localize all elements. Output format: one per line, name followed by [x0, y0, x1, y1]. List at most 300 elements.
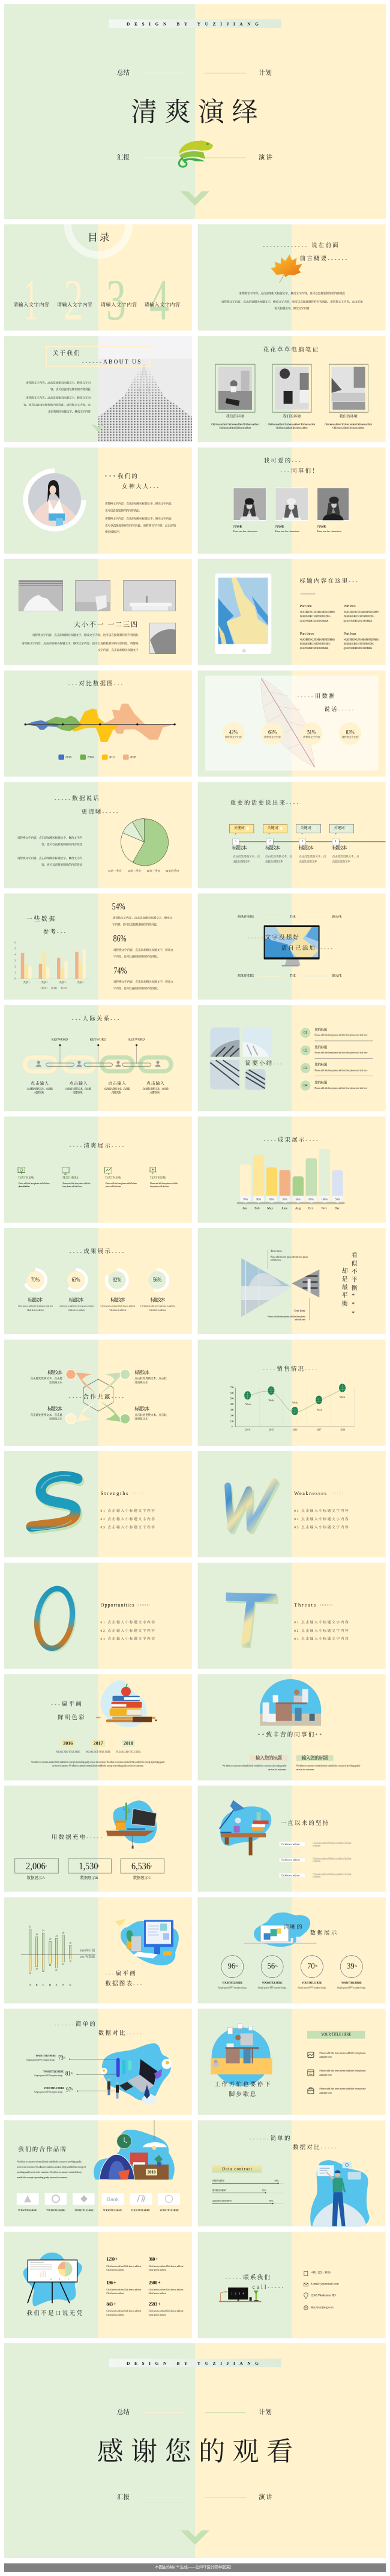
photo 1	[19, 580, 62, 611]
frame	[46, 347, 150, 367]
text block: part four: WE ADHERE TO CUSTOMER-ORIENTED, FIRMLY	[344, 639, 379, 642]
heading: ------简单的	[55, 2020, 97, 2028]
panel: preface 说在前面	[198, 224, 386, 331]
stat 51%: 51%	[307, 729, 316, 735]
body text: 请替换文字内容、点击添加相关标题文字、修改文字内容、也可以直接复制你的内容到此。请替换文字内容、点击添加	[221, 300, 363, 304]
name captions: Here are the characters.	[233, 530, 258, 533]
subheading: 数据图表---	[105, 1980, 144, 1987]
step 2: 标题文本	[265, 845, 280, 851]
caption details: Click here to add text Click here to add text Click here to add text	[325, 422, 373, 425]
chart: line: 0	[232, 1426, 233, 1428]
stat 186+	[106, 2280, 142, 2295]
body text: 请替换文字内容、点击添加相关标题文字、修改文字内容、也可以直接复制你的内容到此。请替换	[22, 641, 139, 645]
letter W	[228, 1482, 277, 1531]
ring captions: 标题文本	[110, 1296, 125, 1302]
list: 03 点击输入小标题文字内容	[101, 1637, 155, 1641]
heading: -----文字没想好	[248, 933, 300, 941]
column right: We adhere to customer-oriented, firmly establish the concept of providing quality	[296, 1765, 361, 1768]
panel: 简要小结	[198, 1005, 386, 1111]
text block: part two	[344, 604, 379, 622]
name captions: NAME	[233, 524, 242, 529]
stat 2593+: Click here to add text Click here to add text	[149, 2310, 184, 2312]
colons: ::::::::	[137, 1604, 149, 1607]
feature 4: here please add title here	[150, 1185, 169, 1188]
panel: 清爽展示	[4, 1116, 192, 1223]
petal top-right	[101, 1370, 130, 1394]
stat 186+: Click here to add text	[106, 2292, 124, 2295]
heading: weaknesses: Weaknesses	[294, 1490, 326, 1496]
item bottom-left	[30, 1406, 62, 1421]
caption details	[211, 422, 373, 429]
panel: 一直以来的坚持	[198, 1786, 386, 1892]
banner: design by: DESIGN BY YUZIJIANG	[127, 22, 259, 26]
tag: data contrast: Data contrast	[222, 2167, 252, 2172]
illustration: office desk	[260, 1679, 321, 1726]
subheading: call-----	[253, 2284, 286, 2290]
item: calendar icon: Please add title here please add title here please	[319, 2069, 366, 2072]
item 2	[279, 1857, 352, 1863]
list: 02 点击输入小标题文字内容	[294, 1628, 349, 1633]
caption details: Click here to add text Click here to add text	[219, 426, 251, 429]
stat 56%	[258, 1956, 287, 1989]
body text: 请替换文字内容、点击添加相关标题文字、修改文字内容、	[105, 502, 174, 506]
hexagon	[83, 1379, 113, 1411]
heading: ---扁平画	[105, 1970, 137, 1977]
label: 计划	[205, 2408, 272, 2416]
item: image icon	[308, 2052, 366, 2058]
stat box 1,530k: 1,530k	[79, 1860, 100, 1872]
body text: 请替换文字内容、点击添加相关标题文字、修改文字内	[26, 395, 91, 400]
heading: ----成果展示----	[70, 1248, 125, 1255]
heading: ----清爽展示----	[70, 1142, 125, 1149]
chart: line: 2018	[341, 1428, 345, 1431]
feature 1	[18, 1167, 50, 1188]
step 4: 4	[335, 840, 337, 843]
ring captions: 标题文本	[150, 1296, 166, 1302]
item top-left: 点击此处更换文本、点击此	[30, 1376, 62, 1380]
text block: part one: ESTABLISH THE CONCEPT OF PROVIDING	[300, 616, 331, 618]
keyword row bottom: THE	[290, 974, 296, 978]
list: 03 点击输入小标题文字内容	[294, 1637, 349, 1641]
stat 74%: 字内容、也可以直接复制你的内容到此。	[113, 986, 160, 990]
label: 总结	[117, 2408, 185, 2416]
chart: rounded bars	[237, 1149, 345, 1211]
translucent card	[205, 675, 379, 771]
panel: 一些数据参考	[4, 893, 192, 999]
feature 3	[104, 1167, 137, 1188]
label: 总结: 总结	[117, 68, 130, 77]
logos row	[17, 2193, 180, 2205]
logo captions: YOUR TITLE HERE	[160, 2209, 179, 2212]
panel: 工作再忙	[198, 2008, 386, 2115]
item 2: Click here to add text	[281, 1859, 300, 1862]
illustration: isometric laptop	[101, 2043, 172, 2104]
label: 总结: 总结	[117, 2408, 130, 2416]
stat 42%	[222, 722, 244, 744]
subheading: 数据展示	[310, 1929, 338, 1936]
item: image icon: add title here	[319, 2055, 332, 2058]
stat 2593+: Click here to add text	[149, 2314, 167, 2316]
stat 39%: Simple general PPT template design.	[337, 1987, 366, 1989]
chart: rounded bars: Aug	[295, 1206, 301, 1210]
panel: 对比数据图	[4, 671, 192, 777]
list item 03	[301, 1062, 373, 1076]
subheading: 数据对比-----	[98, 2029, 144, 2037]
chart: line: 500	[230, 1398, 234, 1400]
colleague photo 2	[275, 488, 308, 521]
photo triangle large	[241, 1258, 292, 1317]
stat 68%	[262, 722, 283, 744]
list item 01: 01	[304, 1031, 307, 1035]
legend: 2017	[109, 756, 115, 759]
keyword row top: THE	[290, 915, 296, 919]
panel: SWOT Threats	[198, 1563, 386, 1669]
label: 计划: 计划	[259, 2408, 272, 2416]
text block: part two: Part two	[344, 604, 356, 608]
item text 1: 点击输入您的文本、点击输	[27, 1087, 53, 1091]
subheading: about us: ------ABOUT US	[82, 359, 142, 365]
list: 01 点击输入小标题文字内容	[294, 1620, 349, 1625]
stat 54%: 54%	[112, 902, 125, 912]
caption details: Click here to add text Click here to add text Click here to add text	[268, 422, 316, 425]
bar labels: 26	[29, 1972, 31, 1975]
chart: diverging bars	[21, 1929, 95, 1971]
column right: 输入您的标题	[302, 1755, 328, 1761]
item text 2: 入您的文本。	[73, 1091, 85, 1095]
heading: ---人际关系---	[72, 1015, 121, 1022]
body text: 也可以直接复制你的内容到此。	[105, 508, 142, 512]
callout 73%: 73%	[58, 2054, 65, 2061]
chart: rounded bars: 55%	[335, 1197, 340, 1200]
stat 39%: YOUR TITLE HERE	[341, 1981, 362, 1984]
feature 4: Please add title here please add title	[150, 1182, 178, 1185]
keyword row top: BRAVE	[332, 915, 342, 919]
contents labels: 请输入文字内容	[144, 301, 180, 307]
step 4: 标题文本	[332, 845, 347, 851]
stat 843+: Click here to add text	[106, 2314, 124, 2316]
panel: 数据说话 pie	[4, 782, 192, 888]
body text	[17, 2161, 86, 2179]
tag: data contrast	[212, 2165, 262, 2173]
legend: 第二季度	[130, 869, 142, 873]
icon: maple leaf	[271, 254, 302, 283]
heading: -----用数据	[298, 692, 336, 699]
item top-right: 标题文本	[134, 1369, 149, 1375]
name captions	[233, 524, 342, 533]
body text: 容、也可以直接复制你的内容到此	[41, 842, 82, 846]
panel: Data contrast	[198, 2120, 386, 2228]
chart: line	[230, 1383, 355, 1431]
callout top: add title here	[271, 1259, 281, 1261]
feature 2: Please add title here please add title	[62, 1182, 91, 1185]
chart: rounded bars: Nov	[321, 1206, 327, 1210]
panel: 同事们	[198, 448, 386, 554]
label: 汇报: 汇报	[117, 154, 130, 161]
list item 01: 您的标题	[314, 1027, 328, 1032]
list: 01 点击输入小标题文字内容	[101, 1620, 155, 1625]
stat 51%: 请替换文字内容	[303, 735, 320, 738]
step 2: 关键词	[268, 825, 278, 830]
photo card 2	[272, 364, 311, 412]
chart: line: 300	[230, 1409, 234, 1411]
callout 97%: Simple general PPT template design.	[34, 2091, 63, 2093]
step 1: 1	[235, 840, 237, 843]
bar labels: C	[42, 1983, 44, 1986]
feature 2: here please add title here	[62, 1185, 82, 1188]
title tag	[307, 2031, 365, 2038]
chart: rounded bars: Oct	[308, 1206, 313, 1210]
callout 81%: Simple general PPT template design.	[34, 2074, 63, 2077]
letter T	[226, 1597, 278, 1648]
chart: rounded bars: 70%	[243, 1197, 248, 1200]
stat 54%: 请替换文字内容、点击添加相关标题文字、修改文	[112, 916, 173, 920]
logo captions: YOUR TITLE HERE	[131, 2209, 150, 2212]
stat box 1,530k	[68, 1859, 112, 1880]
item 1: Click here to add text	[281, 1843, 300, 1846]
panel: 我们的女神大人	[4, 448, 192, 554]
chart: bars: 系列3	[61, 986, 67, 990]
panel: timeline 重要的话	[198, 782, 386, 888]
name captions: NAME	[317, 524, 326, 529]
chart: rounded bars: Feb	[254, 1206, 260, 1210]
column left: We adhere to customer-oriented, firmly establish the concept of providing quality	[223, 1765, 287, 1768]
stat box 2,006k	[15, 1859, 58, 1880]
feature 3: Please add title here please add title here	[106, 1182, 137, 1185]
panel: 致辛苦的同事们	[198, 1674, 386, 1781]
bar labels: 2018年计划	[80, 1948, 95, 1953]
panel: cover slide	[4, 4, 386, 219]
stat 2500+: Click here to add text	[149, 2292, 167, 2295]
panel: 扁平画 books	[4, 1674, 192, 1781]
chart: line: 2015	[269, 1428, 274, 1431]
body text	[31, 1761, 165, 1767]
bar labels: F	[62, 1983, 64, 1986]
illustration: monitor	[264, 925, 320, 966]
item text 3: 点击输入您的文本、点击输	[104, 1087, 130, 1091]
legend: 2016	[88, 756, 94, 759]
text block: part two: ESTABLISH THE CONCEPT OF PROVIDING	[344, 616, 374, 618]
stat 1239+	[106, 2257, 142, 2271]
stat 74%: 74%	[114, 966, 127, 976]
item text 1: 点击输入	[31, 1080, 49, 1086]
contents labels	[13, 301, 180, 307]
contents labels: 请输入文字内容	[101, 301, 137, 307]
ring 63%: 63%	[72, 1277, 80, 1283]
panel: triangles	[198, 1228, 386, 1334]
photo tiles	[210, 1028, 272, 1090]
item top-left	[30, 1369, 62, 1385]
chart: bars: 类别3	[59, 980, 66, 984]
captions	[226, 414, 358, 419]
numerals 1-4: 4	[149, 268, 169, 332]
illustration: interior: 2018	[148, 2170, 156, 2175]
text block: part four: QUALITY SERVICES FOR CUSTOMERS.	[344, 647, 373, 650]
ring details: Click here to add text Click here to add text	[140, 1305, 176, 1307]
caption details: Click here to add text Click here to add text	[332, 426, 365, 429]
stat box 2,006k: 2,006k	[26, 1860, 47, 1872]
bar labels: 10	[69, 1960, 71, 1963]
body text: services for customers. We adhere to customer-oriented, firmly establish the concept of	[17, 2166, 86, 2169]
body text: 请替换文字内容、点击添加相关标题文字、修改文字内容、	[105, 517, 174, 521]
heading: ----合作共赢----	[69, 1393, 125, 1400]
stat 1239+: Click here to add text Click here to add text	[106, 2265, 142, 2268]
panel: 联系我们	[198, 2232, 386, 2338]
list: 02 点击输入小标题文字内容	[101, 1517, 155, 1521]
ring 82%: 82%	[113, 1277, 121, 1283]
ring details: Click here to add text	[149, 1309, 167, 1311]
chart: line: Week	[292, 1401, 298, 1404]
illustration: interior	[94, 2120, 175, 2179]
chart: line: Week	[245, 1403, 251, 1406]
feature 1: Please add title here please add title here	[19, 1182, 50, 1185]
stat 96%	[218, 1956, 247, 1989]
list item 03: 03	[304, 1066, 307, 1070]
captions: 我们的环境	[226, 414, 244, 419]
colons: ::::::::	[131, 1492, 145, 1496]
stat 51%	[301, 722, 323, 744]
chart: rounded bars: 100%	[322, 1197, 328, 1200]
bar labels: 33	[29, 1926, 31, 1928]
contact: phone: +001 123 - 3456	[311, 2272, 331, 2275]
panel: SWOT Opportunities	[4, 1563, 192, 1669]
legend: 第四季度	[168, 869, 179, 873]
bar labels: 34	[42, 1929, 44, 1932]
captions: 我们的环境	[340, 414, 358, 419]
panel: 简单的数据对比 isometric	[4, 2008, 192, 2115]
stat 56%: Simple general PPT template design.	[258, 1987, 287, 1989]
body text: 请替换文字内容、点击添加相关标题文字、修改文字内	[26, 380, 91, 385]
item 3: Click here to add text	[281, 1874, 300, 1877]
step 4: 关键词	[334, 825, 344, 830]
heading: 我们的合作品牌	[18, 2146, 67, 2153]
stat 68%: 68%	[268, 729, 277, 735]
item bottom-right: 标题文本	[134, 1406, 149, 1412]
step 3	[296, 824, 326, 863]
item 2: Click here to add text Click here to add text Click here	[313, 1857, 352, 1860]
list item 02	[301, 1045, 373, 1058]
progress: development: DEVELOPMENT	[212, 2190, 227, 2192]
feature 3: please add title here	[106, 1185, 121, 1188]
item: calendar icon: add title here	[319, 2073, 332, 2076]
item bottom-right: 处更换文本	[134, 1417, 148, 1421]
subheading: 数据对比-----	[293, 2143, 338, 2151]
panel: 合作品牌	[4, 2120, 192, 2226]
callout 97%	[34, 2086, 118, 2093]
chart: rounded bars: 65%	[269, 1197, 274, 1200]
illustration: shelf with monitor	[106, 1800, 157, 1849]
ring details: Click here to add text	[68, 1309, 85, 1311]
text block: part three: WE ADHERE TO CUSTOMER-ORIENTED, FIRMLY	[300, 639, 335, 642]
chart: rounded bars: 80%	[308, 1197, 314, 1200]
body text: 也可以直接复制你的内容到此。请替换文字内容、点击添加	[105, 523, 176, 527]
step 4: 击此处更换文本	[332, 859, 350, 863]
chart: line: 2014	[245, 1428, 250, 1431]
step 3: 击此处更换文本	[299, 859, 317, 863]
ring details: Click here to add text Click here to add text	[18, 1305, 53, 1307]
ring 56%: 56%	[153, 1277, 161, 1283]
panel: 用数据说话	[198, 671, 386, 777]
item bottom-right	[134, 1406, 167, 1421]
contact: email: E-mail: youremail.com	[311, 2283, 339, 2286]
step 1: 击此处更换文本	[233, 859, 250, 863]
item top-right: 点击此处更换文本、点击此	[134, 1376, 167, 1380]
ring 56%	[146, 1269, 168, 1290]
ring details: Click here to add text Click here to add text	[59, 1305, 94, 1307]
item 1	[279, 1842, 352, 1847]
item: briefcase icon: add title here	[319, 2091, 332, 2094]
numerals 1-4: 3	[106, 268, 126, 332]
body text: establish the concept of providing quality services for customers.	[17, 2176, 68, 2179]
step 2: 点击此处更换文本、点	[265, 854, 292, 858]
chart: rounded bars: 30%	[295, 1197, 301, 1200]
stat 360+	[149, 2257, 184, 2271]
feature 1: TEXT HERE	[18, 1176, 34, 1179]
callout 97%: YOUR TITLE HERE	[44, 2086, 64, 2089]
stat 96%: YOUR TITLE HERE	[222, 1981, 242, 1984]
vertical text 2: 却是最平衡	[340, 1267, 347, 1308]
progress: creative content: 85%	[269, 2200, 274, 2202]
item bottom-left: 标题文本	[47, 1406, 62, 1412]
stat 42%: 请替换文字内容	[225, 735, 242, 738]
item 2: to add text	[313, 1860, 320, 1863]
contact: address	[304, 2293, 336, 2299]
letter S	[31, 1475, 79, 1529]
list item 03: 您的标题	[314, 1062, 328, 1067]
chart: line: 600	[230, 1392, 234, 1394]
list	[294, 1508, 349, 1530]
legend: 第一季度	[110, 869, 122, 873]
illustration: desk	[219, 2287, 261, 2301]
letter O	[33, 1586, 77, 1652]
year 2016: PLEASE ADD TITLE HERE	[56, 1750, 80, 1753]
text block: part four: Part four	[344, 632, 356, 636]
chart: line: 700	[230, 1386, 234, 1389]
callout bottom: add title here	[295, 1319, 305, 1321]
subheading: 参考---	[43, 928, 68, 935]
illustration: laptop	[244, 1913, 316, 1947]
item text 4: 点击输入您的文本、点击输	[142, 1087, 169, 1091]
feature 2	[62, 1167, 91, 1188]
item text 4: 入您的文本。	[149, 1091, 161, 1095]
heading: 简要小结---	[245, 1059, 284, 1067]
body text: We adhere to customer-oriented, firmly establish the concept of providing quality	[17, 2161, 82, 2164]
chart: bars: 2	[14, 966, 16, 968]
ring details: Click here to add text	[27, 1309, 44, 1311]
item 1: to add text	[313, 1845, 320, 1847]
subheading: ---同事们！	[281, 467, 319, 475]
item 3: to add text	[313, 1876, 320, 1878]
feature 4: TEXT HERE	[150, 1176, 166, 1179]
item bottom-left: 点击此处更换文本、点击此	[30, 1413, 62, 1417]
feature 1: please add title here	[19, 1185, 30, 1188]
chart: line: 2017	[317, 1428, 321, 1431]
stat 96%: 96%	[228, 1962, 238, 1971]
stat 2500+: 2500 +	[149, 2280, 161, 2286]
panel: SWOT Strengths	[4, 1451, 192, 1557]
panel: about us	[4, 336, 192, 442]
photo 3	[124, 580, 176, 611]
chart: bars: 0	[14, 978, 16, 980]
bar labels: 20	[35, 1968, 38, 1970]
label: 总结	[117, 68, 185, 77]
ring captions: 标题文本	[69, 1296, 84, 1302]
column right	[296, 1755, 361, 1771]
item 3	[279, 1873, 352, 1878]
body text: services for customers. We adhere to customer-oriented, firmly establish the concept of providing quality services for customers.	[52, 1764, 144, 1767]
panel: 大小不一 gallery	[4, 559, 192, 665]
bar labels: B	[35, 1983, 38, 1986]
heading: ------简单的	[250, 2135, 292, 2142]
